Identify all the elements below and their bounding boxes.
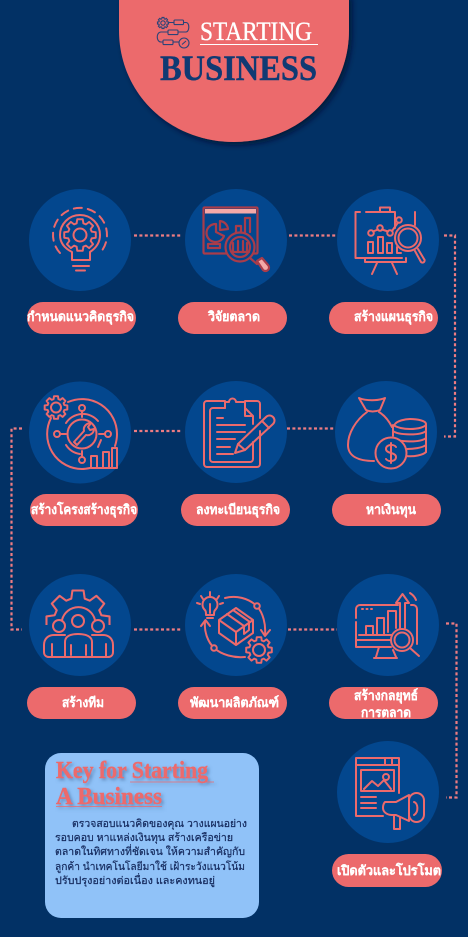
label pill [27,302,136,334]
label [354,688,418,720]
label pill [30,494,138,526]
icon circle [337,574,439,676]
label pill [332,854,442,887]
icon: presentation board [356,208,425,274]
label pill [178,302,287,334]
step 8: product development [178,574,287,719]
panel: key for starting a business [45,753,259,918]
card heading: Key for Starting [56,758,208,784]
card background [45,753,259,918]
label: การตลาด [361,705,411,720]
label: หาเงินทุน [366,502,416,518]
label pill [178,687,287,719]
card heading [56,758,214,810]
step 9: marketing strategy [329,574,439,720]
icon circle [185,189,287,291]
label: สร้างแผนธุรกิจ [354,309,433,325]
icon: workflow [157,17,189,48]
icon: market research [204,208,269,271]
step 10: launch and promote [332,741,442,887]
label pill [27,687,136,719]
icon: team gear [44,590,113,657]
icon circle [337,741,439,843]
step 7: build team [27,574,136,719]
card body text: รอบคอบ หาแหล่งเงินทุน สร้างเครือข่าย [55,831,233,844]
icon circle [335,381,437,483]
icon circle [29,574,131,676]
step 4: business structure [29,382,138,526]
label pill [329,302,438,334]
card body text: ลูกค้า นำเทคโนโลยีมาใช้ เฝ้าระวังแนวโน้ม [55,860,245,873]
step 2: market research [178,189,287,334]
card body text: ตรวจสอบแนวคิดของคุณ วางแผนอย่าง [72,818,247,830]
card body text [55,818,247,887]
icon circle [29,189,131,291]
icon: structure wrench [45,396,117,469]
label: พัฒนาผลิตภัณฑ์ [190,695,279,710]
icon: money bag and coins [348,398,426,468]
card body text: ตลาดในทิศทางที่ชัดเจน ให้ความสำคัญกับ [55,844,245,858]
step 6: raise funds [332,381,441,526]
step 3: business plan [329,189,439,334]
icon: monitor chart [356,593,419,658]
label pill [332,494,441,526]
heading: business: BUSINESS [160,48,317,88]
icon: product cycle [197,592,272,663]
label: ลงทะเบียนธุรกิจ [196,502,280,518]
icon circle [185,381,287,483]
label: สร้างทีม [62,695,104,710]
label: สร้างโครงสร้างธุรกิจ [31,501,137,518]
label: กำหนดแนวคิดธุรกิจ [27,309,134,325]
icon: clipboard and pencil [203,398,274,467]
icon: page and megaphone [356,758,424,829]
heading: starting: STARTING [200,17,312,46]
header [119,0,349,142]
step 1: concept [27,189,136,334]
step 5: register business [181,381,290,526]
icon: lightbulb gear [53,208,107,270]
label pill [329,687,438,719]
label: เปิดตัวและโปรโมต [337,862,441,878]
icon circle [185,574,287,676]
connector paths [12,236,456,798]
card heading: A Business [56,784,162,810]
header shape [119,0,349,142]
icon circle [337,189,439,291]
icon circle [29,382,131,484]
label: วิจัยตลาด [207,309,260,324]
label: สร้างกลยุทธ์ [354,688,418,704]
card body text: ปรับปรุงอย่างต่อเนื่อง และคงทนอยู่ [55,873,215,887]
label pill [181,494,290,526]
